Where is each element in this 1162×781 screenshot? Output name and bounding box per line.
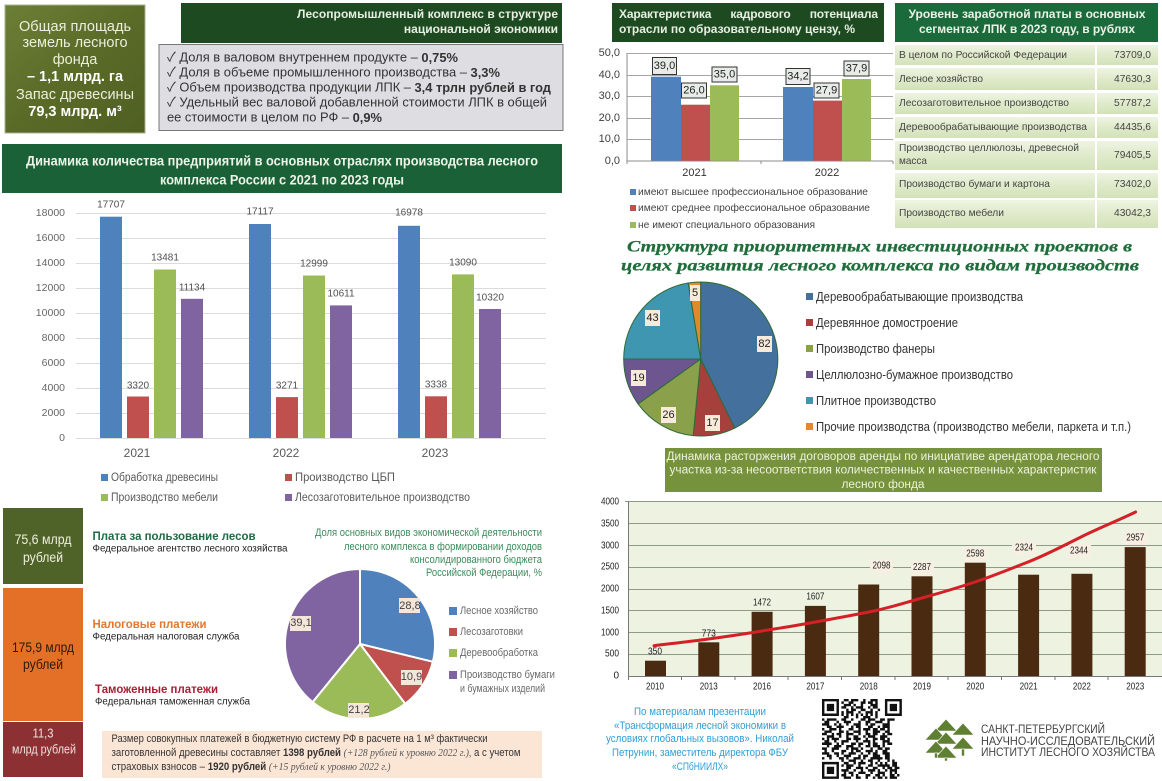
stat block: tax payments: рублей bbox=[23, 656, 63, 672]
text: customs payments: Федеральная таможенная служба bbox=[95, 696, 250, 708]
table: wages by segment: Деревообрабатывающие производства bbox=[899, 121, 1087, 133]
table: wages by segment: Лесозаготовительное производство bbox=[899, 97, 1069, 109]
bar chart: enterprises by sector 2021-2023: 6000 bbox=[42, 357, 65, 369]
pie chart: investment projects: 82 bbox=[758, 338, 771, 350]
text: source note: «Трансформация лесной экономики в bbox=[614, 720, 786, 732]
bar chart: staff education bbox=[599, 47, 893, 179]
bar chart: lease terminations 2010-2023 with trend line: 2598 bbox=[966, 548, 985, 560]
pie chart: investment projects: 19 bbox=[632, 372, 645, 384]
bar chart: lease terminations 2010-2023 with trend line: 1000 bbox=[601, 628, 619, 638]
text: tax payments: Федеральная налоговая служба bbox=[92, 630, 240, 642]
stat block: customs payments bbox=[3, 722, 83, 777]
table: wages by segment: 79405,5 bbox=[1114, 149, 1151, 161]
stat box: forest land area: Общая площадь bbox=[19, 19, 131, 35]
legend: enterprises chart: Лесозаготовительное производство bbox=[295, 492, 470, 504]
bar chart: enterprises by sector 2021-2023: 17117 bbox=[246, 206, 274, 218]
text: budget share chart title: Российской Федерации, % bbox=[426, 567, 542, 579]
bar chart: enterprises by sector 2021-2023: 16000 bbox=[36, 232, 65, 244]
panel: key shares of the forest industry: ✓ Объем производства продукции ЛПК – 3,4 трлн рублей в год bbox=[167, 80, 552, 94]
pie chart: investment projects: 5 bbox=[692, 287, 698, 299]
table: wages by segment: масса bbox=[899, 155, 927, 167]
legend: enterprises chart: Обработка древесины bbox=[111, 472, 218, 484]
bar chart: enterprises by sector 2021-2023: 2021 bbox=[124, 446, 151, 460]
text: source note: По материалам презентации bbox=[634, 706, 766, 718]
pie chart: investment projects: 26 bbox=[662, 409, 675, 421]
legend: budget revenue pie: Лесное хозяйство bbox=[460, 605, 538, 617]
table: wages by segment: 73402,0 bbox=[1114, 178, 1151, 190]
bar chart: lease terminations 2010-2023 with trend line: 2016 bbox=[753, 682, 771, 692]
text: budget share chart title: консолидированного бюджета bbox=[410, 554, 543, 566]
bar chart: enterprises by sector 2021-2023: 8000 bbox=[42, 332, 65, 344]
table: wages by segment: Производство бумаги и картона bbox=[899, 178, 1050, 190]
heading: lease termination dynamics bbox=[665, 448, 1102, 492]
pie chart: budget revenue shares: 39,1 bbox=[290, 617, 312, 629]
bar chart: staff education: 34,2 bbox=[787, 70, 809, 82]
bar chart: staff education: 27,9 bbox=[816, 84, 837, 96]
bar chart: enterprises by sector 2021-2023: 11134 bbox=[179, 282, 206, 294]
bar chart: enterprises by sector 2021-2023: 10000 bbox=[36, 307, 65, 319]
stat box: forest land area: 79,3 млрд. м³ bbox=[28, 104, 122, 120]
legend: investment projects: Производство фанеры bbox=[816, 342, 935, 356]
text: forest use fee bbox=[92, 529, 288, 554]
callout: total payments per cubic metre: заготовленной древесины составляет 1398 рублей (+128 рублей к уровню 2022 г.), а с учетом bbox=[112, 747, 520, 759]
bar chart: lease terminations 2010-2023 with trend line: 1607 bbox=[806, 592, 825, 602]
heading: investment projects structure: Структура приоритетных инвестиционных проектов в bbox=[627, 238, 1132, 256]
bar chart: staff education: 2022 bbox=[815, 167, 839, 179]
legend: investment projects: Деревообрабатывающие производства bbox=[816, 290, 1023, 304]
legend: enterprises chart: Производство ЦБП bbox=[295, 472, 395, 484]
heading: wages: сегментах ЛПК в 2023 году, в рублях bbox=[919, 22, 1135, 36]
heading: enterprises dynamics: комплекса России с 2021 по 2023 годы bbox=[160, 172, 404, 188]
heading: enterprises dynamics bbox=[2, 144, 562, 193]
legend: budget revenue pie bbox=[449, 605, 555, 695]
legend: investment projects: Целлюлозно-бумажное производство bbox=[816, 368, 1013, 382]
pie chart: investment projects bbox=[624, 282, 778, 436]
pie chart: budget revenue shares: 10,9 bbox=[401, 671, 422, 683]
bar chart: lease terminations 2010-2023 with trend line: 2013 bbox=[700, 682, 718, 692]
bar chart: staff education: 0,0 bbox=[605, 155, 620, 167]
bar chart: enterprises by sector 2021-2023: 3338 bbox=[425, 380, 448, 390]
heading: industry in national economy bbox=[181, 3, 562, 43]
callout: total payments per cubic metre bbox=[102, 731, 542, 778]
table: wages by segment: Лесное хозяйство bbox=[899, 73, 983, 85]
bar chart: enterprises by sector 2021-2023: 13481 bbox=[151, 252, 179, 264]
bar chart: enterprises by sector 2021-2023: 12000 bbox=[36, 282, 65, 294]
bar chart: lease terminations 2010-2023 with trend line: 2010 bbox=[646, 682, 664, 692]
heading: wages: Уровень заработной платы в основных bbox=[908, 7, 1146, 21]
legend: staff education: имеют высшее профессиональное образование bbox=[638, 186, 868, 198]
text: institute name: САНКТ-ПЕТЕРБУРГСКИЙ bbox=[981, 721, 1105, 736]
heading: investment projects structure bbox=[621, 238, 1139, 274]
legend: investment projects: Плитное производство bbox=[816, 394, 936, 408]
bar chart: enterprises by sector 2021-2023: 2023 bbox=[422, 446, 449, 460]
bar chart: lease terminations 2010-2023 with trend line: 2017 bbox=[806, 682, 825, 692]
heading: staff education bbox=[612, 3, 884, 42]
stat block: customs payments: млрд рублей bbox=[12, 742, 76, 756]
bar chart: staff education: 39,0 bbox=[654, 60, 675, 72]
bar chart: lease terminations 2010-2023 with trend line: 2500 bbox=[601, 562, 619, 572]
legend: enterprises chart bbox=[101, 472, 470, 504]
bar chart: enterprises by sector 2021-2023: 18000 bbox=[36, 207, 65, 219]
bar chart: lease terminations 2010-2023 with trend line: 2000 bbox=[601, 584, 619, 594]
panel: key shares of the forest industry: ✓ Доля в объеме промышленного производства – 3,3% bbox=[167, 64, 500, 80]
heading: wages bbox=[895, 3, 1158, 42]
text: budget share chart title bbox=[315, 527, 543, 579]
text: forest use fee: Федеральное агентство лесного хозяйства bbox=[92, 544, 288, 554]
bar chart: enterprises by sector 2021-2023: 2022 bbox=[273, 446, 300, 460]
text: source note: «СПбНИИЛХ» bbox=[672, 761, 728, 773]
table: wages by segment: В целом по Российской Федерации bbox=[899, 49, 1067, 61]
callout: total payments per cubic metre: страховых взносов – 1920 рублей (+15 рублей к уровню 2022 г.) bbox=[112, 761, 391, 773]
bar chart: lease terminations 2010-2023 with trend line: 2098 bbox=[872, 560, 891, 572]
table: wages by segment bbox=[895, 45, 1158, 228]
text: institute name bbox=[981, 721, 1155, 759]
bar chart: enterprises by sector 2021-2023: 3271 bbox=[276, 380, 299, 392]
bar chart: staff education: 50,0 bbox=[599, 47, 620, 59]
stat box: forest land area bbox=[5, 5, 145, 133]
table: wages by segment: Производство мебели bbox=[899, 207, 1004, 219]
bar chart: lease terminations 2010-2023 with trend line: 2022 bbox=[1073, 682, 1091, 692]
bar chart: lease terminations 2010-2023 with trend line: 2021 bbox=[1020, 682, 1038, 692]
table: wages by segment: 73709,0 bbox=[1114, 49, 1151, 61]
bar chart: enterprises by sector 2021-2023: 10611 bbox=[327, 288, 355, 300]
stat box: forest land area: земель лесного bbox=[22, 35, 128, 51]
bar chart: staff education: 35,0 bbox=[714, 68, 735, 80]
legend: investment projects: Прочие производства (производство мебели, паркета и т.п.) bbox=[816, 420, 1131, 434]
heading: lease termination dynamics: лесного фонда bbox=[842, 479, 925, 491]
bar chart: lease terminations 2010-2023 with trend line: 2019 bbox=[913, 682, 931, 692]
bar chart: lease terminations 2010-2023 with trend line: 0 bbox=[613, 670, 619, 682]
pie chart: budget revenue shares bbox=[285, 569, 435, 719]
panel: key shares of the forest industry: ее стоимости в целом по РФ – 0,9% bbox=[167, 110, 382, 124]
bar chart: staff education: 26,0 bbox=[683, 84, 705, 96]
text: forest use fee: Плата за пользование лесов bbox=[92, 529, 256, 543]
heading: industry in national economy: Лесопромышленный комплекс в структуре bbox=[297, 7, 558, 21]
legend: enterprises chart: Производство мебели bbox=[111, 492, 218, 504]
bar chart: enterprises by sector 2021-2023: 10320 bbox=[476, 292, 504, 304]
table: wages by segment: 44435,6 bbox=[1114, 121, 1151, 133]
heading: enterprises dynamics: Динамика количества предприятий в основных отраслях производства лесного bbox=[26, 154, 538, 168]
pie chart: budget revenue shares: 21,2 bbox=[348, 704, 370, 716]
bar chart: enterprises by sector 2021-2023: 3320 bbox=[127, 380, 150, 392]
bar chart: enterprises by sector 2021-2023: 14000 bbox=[36, 257, 65, 269]
stat box: forest land area: Запас древесины bbox=[16, 87, 134, 103]
stat block: forest use payments: рублей bbox=[23, 549, 63, 565]
bar chart: lease terminations 2010-2023 with trend line: 2324 bbox=[1015, 542, 1033, 554]
legend: investment projects bbox=[806, 290, 1131, 434]
icon: QR code bbox=[822, 699, 902, 779]
table: wages by segment: Производство целлюлозы, древесной bbox=[899, 142, 1079, 154]
bar chart: lease terminations 2010-2023 with trend line: 2344 bbox=[1070, 546, 1088, 556]
text: customs payments bbox=[95, 682, 250, 708]
bar chart: enterprises by sector 2021-2023: 16978 bbox=[395, 208, 423, 218]
bar chart: staff education: 2021 bbox=[682, 167, 707, 179]
legend: budget revenue pie: Деревообработка bbox=[460, 647, 539, 659]
heading: lease termination dynamics: Динамика расторжения договоров аренды по инициативе арендатора лесного bbox=[666, 451, 1100, 463]
bar chart: lease terminations 2010-2023 with trend line: 3500 bbox=[601, 518, 619, 530]
icon: institute logo trees bbox=[925, 719, 974, 761]
bar chart: lease terminations 2010-2023 with trend line: 2957 bbox=[1126, 532, 1145, 544]
legend: staff education: имеют среднее профессиональное образование bbox=[638, 202, 870, 214]
bar chart: enterprises by sector 2021-2023: 17707 bbox=[97, 200, 125, 210]
bar chart: lease terminations 2010-2023 with trend line: 4000 bbox=[601, 496, 619, 508]
bar chart: lease terminations 2010-2023 with trend line: 2018 bbox=[860, 682, 878, 692]
text: budget share chart title: лесного комплекса в формировании доходов bbox=[344, 541, 542, 553]
stat block: forest use payments bbox=[3, 508, 83, 584]
panel: key shares of the forest industry bbox=[159, 44, 563, 130]
bar chart: staff education: 30,0 bbox=[599, 90, 620, 102]
text: source note bbox=[606, 706, 794, 773]
table: wages by segment: 47630,3 bbox=[1114, 73, 1151, 85]
bar chart: enterprises by sector 2021-2023: 13090 bbox=[449, 258, 477, 268]
legend: budget revenue pie: Лесозаготовки bbox=[460, 626, 523, 638]
stat block: customs payments: 11,3 bbox=[32, 726, 54, 740]
bar chart: staff education: 20,0 bbox=[599, 112, 620, 124]
legend: staff education bbox=[630, 186, 870, 231]
table: wages by segment: 57787,2 bbox=[1114, 97, 1151, 109]
pie chart: investment projects: 17 bbox=[706, 417, 719, 429]
bar chart: enterprises by sector 2021-2023: 12999 bbox=[300, 258, 328, 270]
bar chart: lease terminations 2010-2023 with trend line: 2287 bbox=[913, 562, 931, 573]
stat block: tax payments bbox=[3, 588, 83, 721]
stat block: tax payments: 175,9 млрд bbox=[12, 639, 74, 655]
bar chart: staff education: 37,9 bbox=[846, 62, 867, 74]
text: source note: Петрунин, заместитель директора ФБУ bbox=[612, 747, 789, 759]
panel: key shares of the forest industry: ✓ Доля в валовом внутреннем продукте – 0,75% bbox=[167, 50, 458, 64]
bar chart: staff education: 10,0 bbox=[599, 133, 620, 145]
table: wages by segment: 43042,3 bbox=[1114, 207, 1151, 219]
heading: lease termination dynamics: участка из-за несоответствия количественных и качественных характеристик bbox=[670, 464, 1097, 476]
heading: staff education: отрасли по образовательному цензу, % bbox=[619, 22, 855, 36]
bar chart: enterprises by sector 2021-2023: 2000 bbox=[42, 407, 65, 419]
heading: industry in national economy: национальной экономики bbox=[404, 22, 558, 36]
bar chart: lease terminations 2010-2023 with trend line: 3000 bbox=[601, 540, 619, 552]
callout: total payments per cubic metre: Размер совокупных платежей в бюджетную систему РФ в расчете на 1 м³ фактически bbox=[112, 733, 488, 745]
bar chart: lease terminations 2010-2023 with trend line: 500 bbox=[605, 648, 619, 660]
legend: budget revenue pie: Производство бумаги bbox=[460, 669, 555, 681]
stat box: forest land area: – 1,1 млрд. га bbox=[27, 69, 124, 85]
bar chart: lease terminations 2010-2023 with trend line: 1500 bbox=[601, 606, 619, 616]
text: budget share chart title: Доля основных видов экономической деятельности bbox=[315, 527, 542, 539]
pie chart: budget revenue shares: 28,8 bbox=[399, 600, 421, 612]
bar chart: lease terminations 2010-2023 with trend line: 2020 bbox=[966, 682, 985, 692]
bar chart: lease terminations 2010-2023 with trend line: 773 bbox=[702, 628, 716, 640]
text: tax payments bbox=[92, 617, 240, 642]
pie chart: investment projects: 43 bbox=[646, 312, 659, 324]
stat box: forest land area: фонда bbox=[53, 52, 98, 68]
legend: staff education: не имеют специального образования bbox=[638, 219, 815, 231]
bar chart: lease terminations 2010-2023 with trend line: 1472 bbox=[753, 598, 771, 608]
bar chart: staff education: 40,0 bbox=[599, 69, 620, 81]
bar chart: enterprises by sector 2021-2023: 4000 bbox=[42, 382, 65, 394]
text: customs payments: Таможенные платежи bbox=[95, 682, 218, 696]
legend: budget revenue pie: и бумажных изделий bbox=[460, 683, 545, 695]
stat block: forest use payments: 75,6 млрд bbox=[14, 531, 72, 547]
text: source note: условиях глобальных вызовов». Николай bbox=[606, 733, 794, 745]
text: tax payments: Налоговые платежи bbox=[92, 617, 206, 631]
bar chart: lease terminations 2010-2023 with trend line: 2023 bbox=[1126, 682, 1145, 692]
bar chart: lease terminations 2010-2023 with trend line: 350 bbox=[648, 646, 662, 658]
bar chart: enterprises by sector 2021-2023 bbox=[36, 200, 546, 460]
heading: investment projects structure: целях развития лесного комплекса по видам производств bbox=[621, 258, 1139, 274]
bar chart: enterprises by sector 2021-2023: 0 bbox=[59, 432, 65, 444]
heading: staff education: Характеристика кадрового потенциала bbox=[619, 7, 878, 21]
legend: investment projects: Деревянное домостроение bbox=[816, 316, 958, 330]
panel: key shares of the forest industry: ✓ Удельный вес валовой добавленной стоимости ЛПК в общей bbox=[167, 94, 547, 110]
bar chart: lease terminations 2010-2023 with trend line bbox=[601, 496, 1162, 692]
